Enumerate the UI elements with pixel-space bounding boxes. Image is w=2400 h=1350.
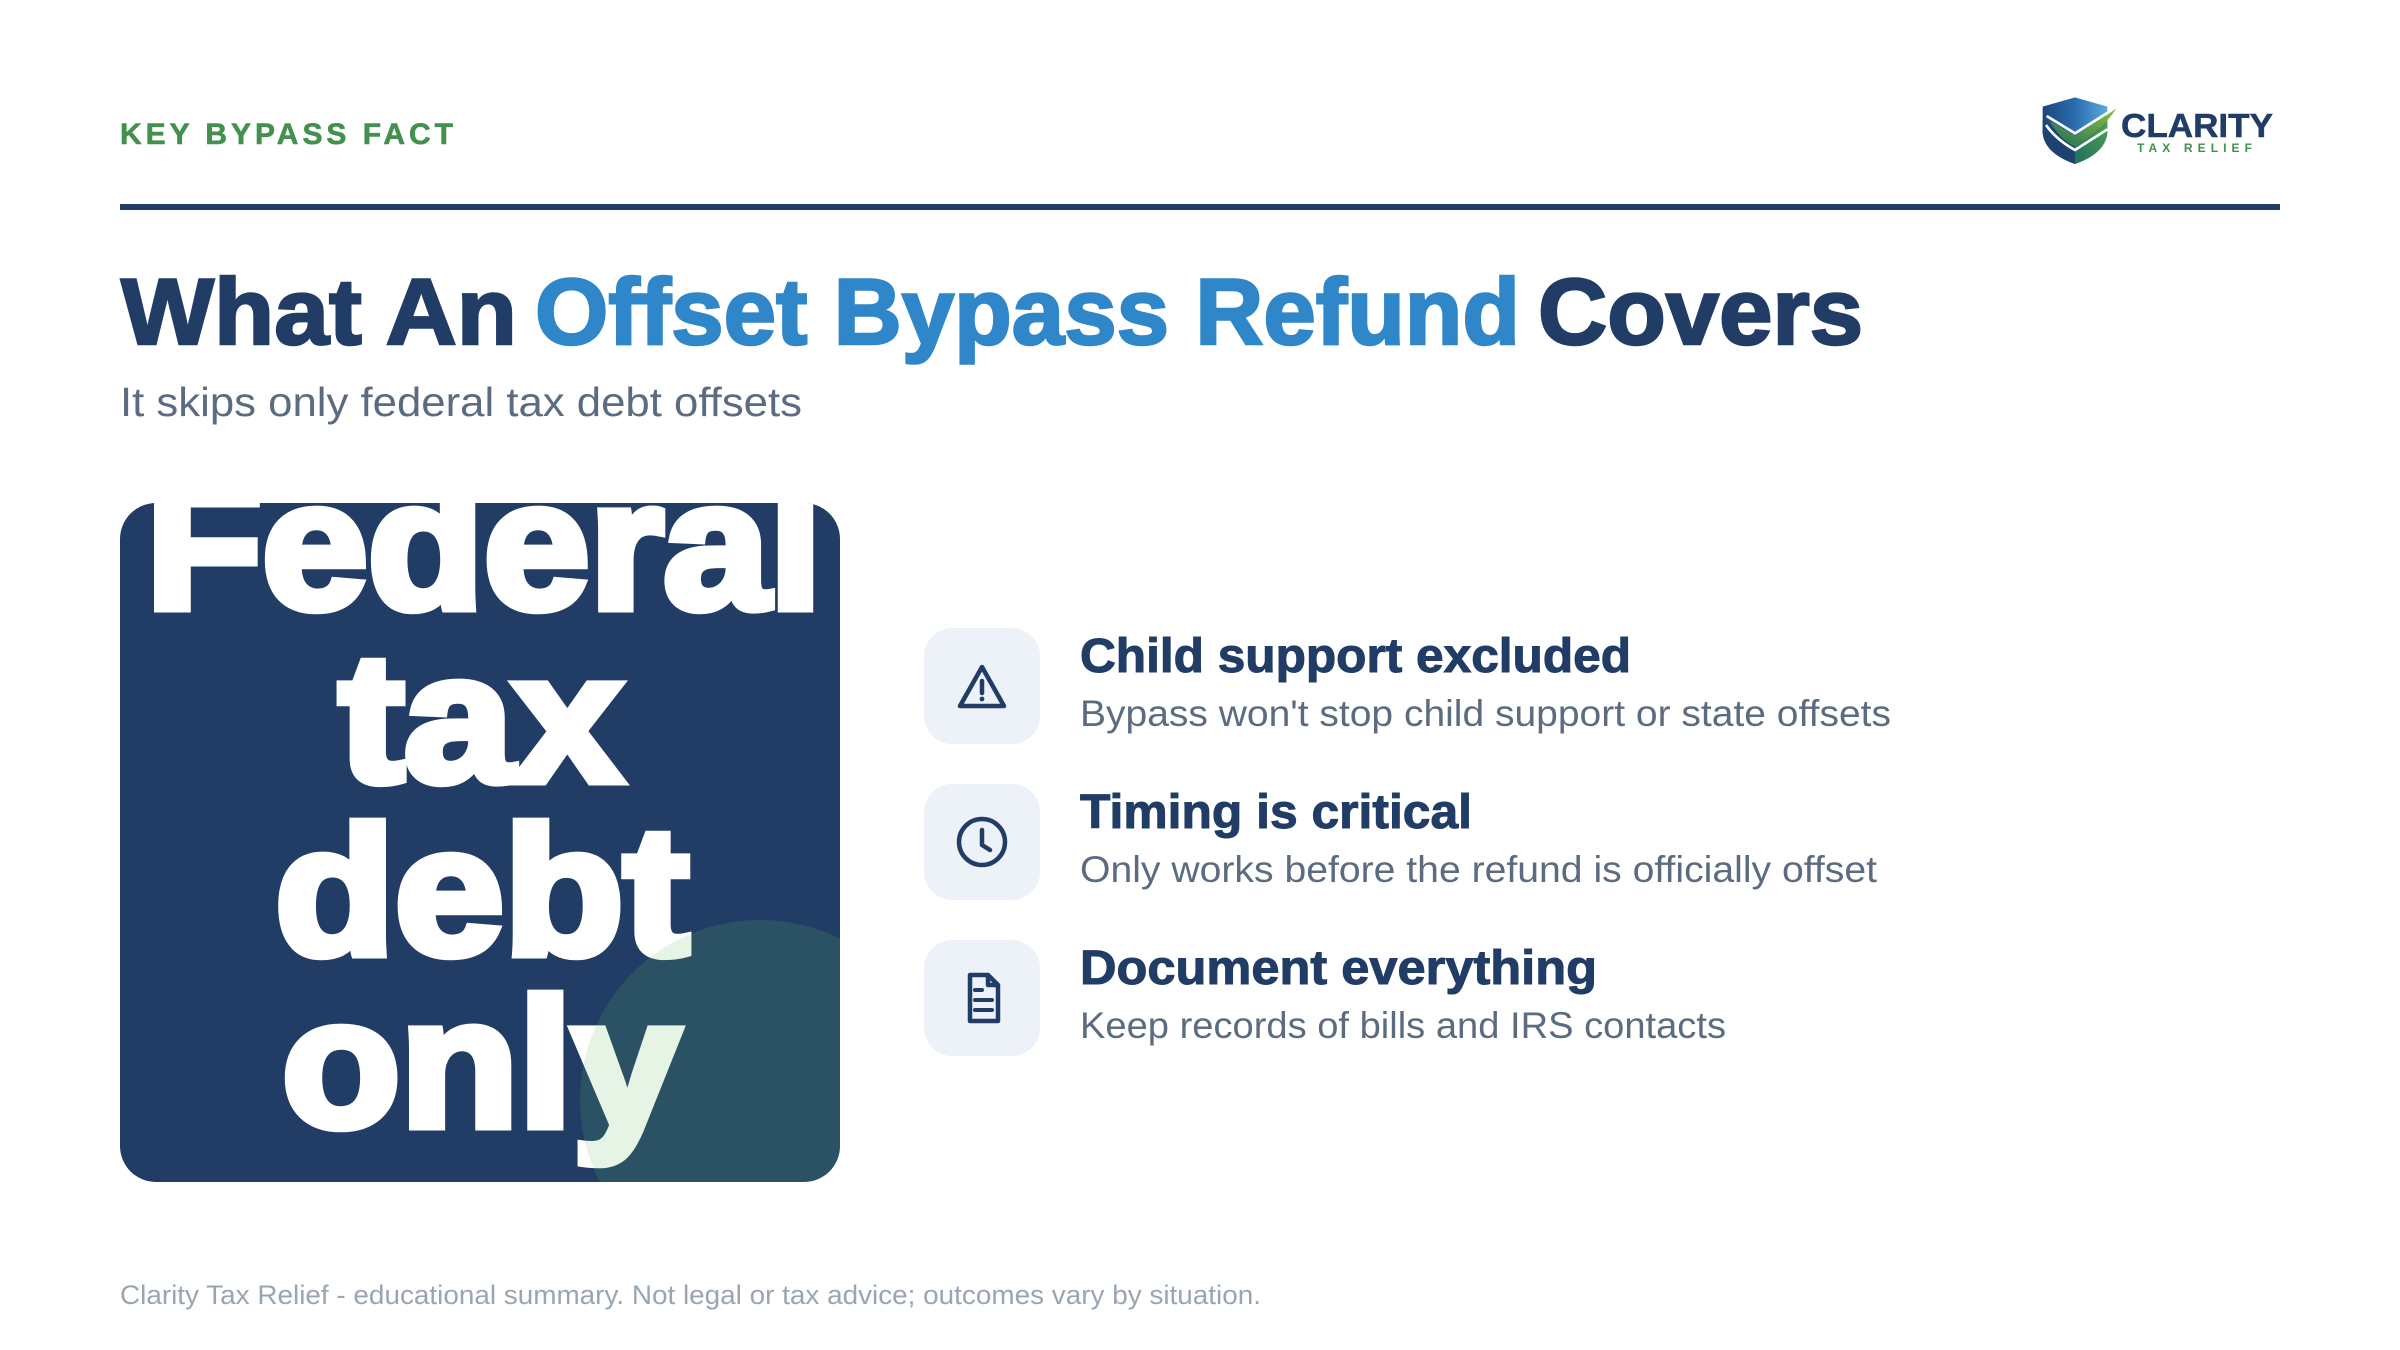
subtitle: It skips only federal tax debt offsets [120, 379, 802, 425]
item description: Keep records of bills and IRS contacts [1080, 1005, 1726, 1046]
item heading: Document everything [1080, 942, 1597, 995]
title: Offset Bypass Refund [535, 259, 1520, 364]
title: What An [121, 259, 517, 364]
item: document everything [924, 940, 1726, 1056]
item heading: Child support excluded [1080, 630, 1631, 683]
decorative circle [580, 920, 840, 1182]
icon: shield [2043, 97, 2117, 164]
statement text: Federal [146, 443, 822, 647]
item: child support excluded [924, 628, 1891, 744]
panel: key statement [120, 503, 840, 1182]
header divider [120, 204, 2280, 210]
statement text: tax [339, 616, 622, 820]
icon tile: clock [924, 784, 1040, 900]
title [121, 259, 1863, 364]
logo: Clarity Tax Relief [2043, 97, 2273, 164]
logo tagline: TAX RELIEF [2137, 141, 2252, 155]
footer disclaimer: Clarity Tax Relief - educational summary. Not legal or tax advice; outcomes vary by situation. [120, 1280, 1261, 1310]
item description: Bypass won't stop child support or state offsets [1080, 693, 1891, 734]
statement text [154, 503, 814, 1168]
item description: Only works before the refund is officially offset [1080, 849, 1878, 890]
statement text: debt [275, 789, 689, 993]
item: timing is critical [924, 784, 1878, 900]
logo wordmark: CLARITY [2121, 107, 2273, 144]
eyebrow label: KEY BYPASS FACT [120, 118, 453, 151]
title: Covers [1538, 259, 1863, 364]
icon tile: document [924, 940, 1040, 1056]
statement text: only [282, 961, 680, 1165]
item heading: Timing is critical [1080, 786, 1472, 839]
icon tile: warning [924, 628, 1040, 744]
